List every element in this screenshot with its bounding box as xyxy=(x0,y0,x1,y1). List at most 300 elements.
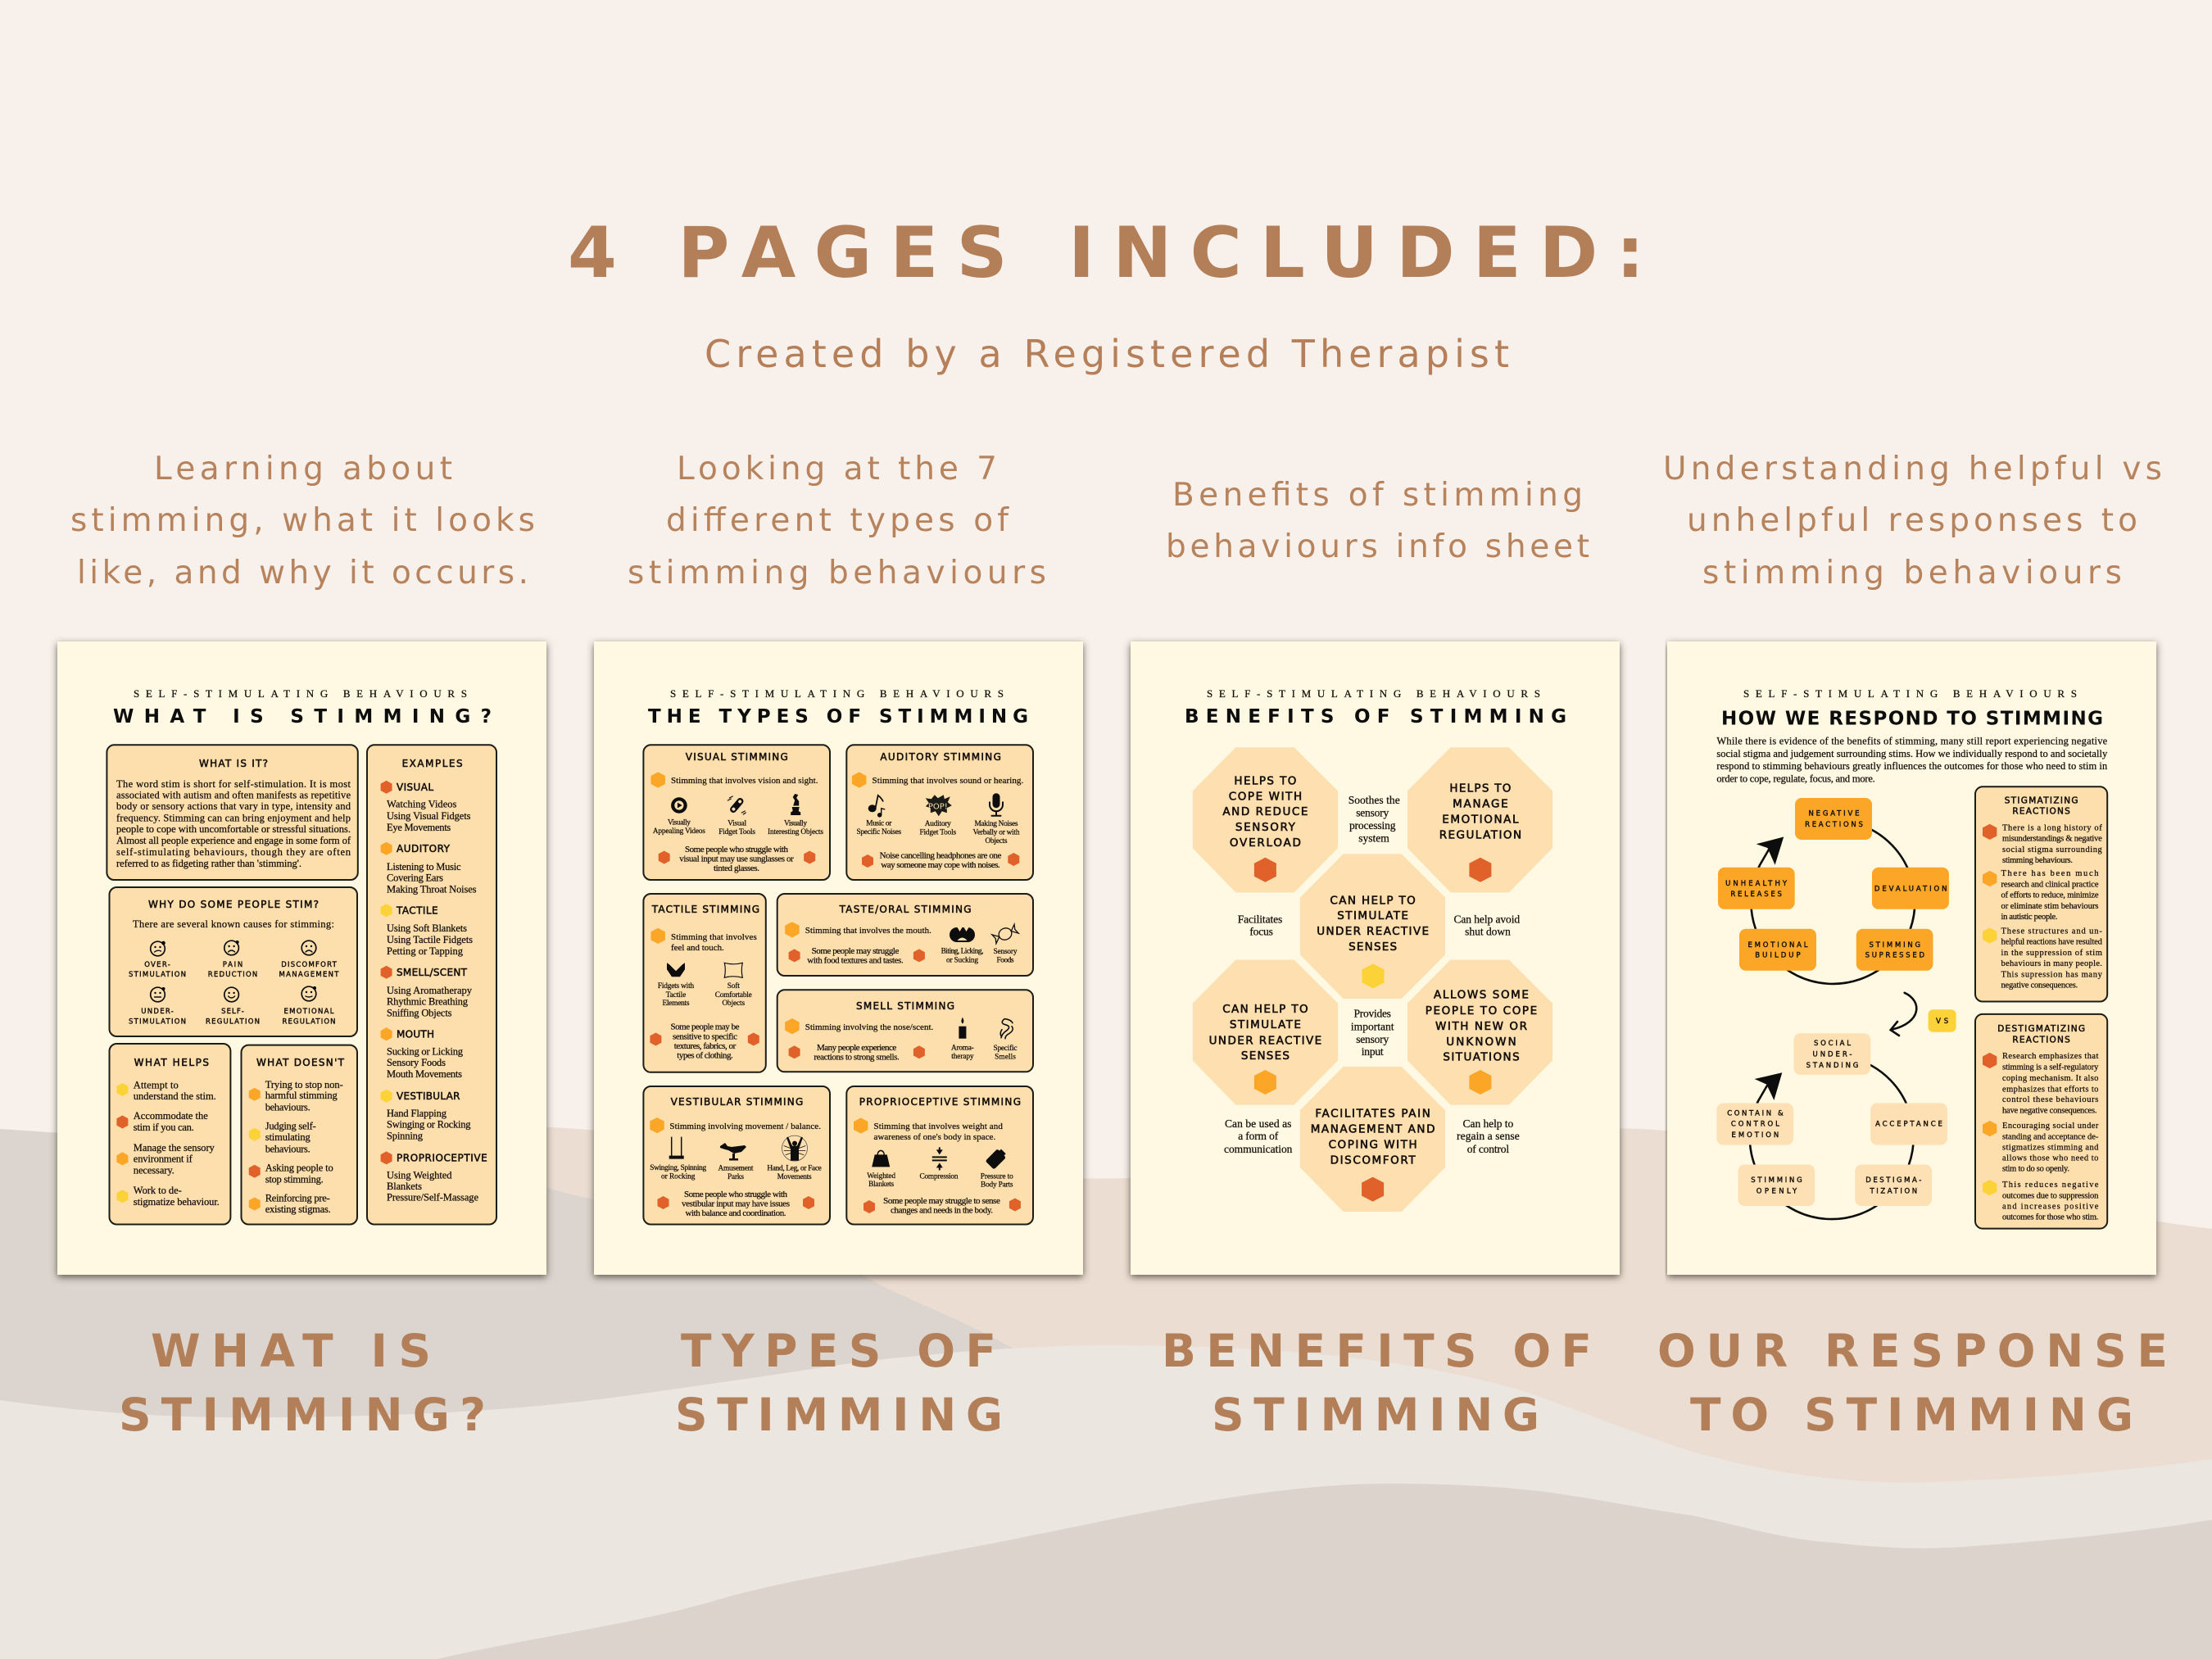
panel: destigmatizing reactions: allows those who need to xyxy=(2002,1154,2098,1163)
panel: visual stimming: Stimming that involves vision and sight. xyxy=(671,776,818,786)
panel: what is it: Almost all people experience and engage in some form of xyxy=(116,835,351,846)
panel: examples: MOUTH xyxy=(397,1029,434,1040)
panel: examples: Using Tactile Fidgets xyxy=(387,934,473,945)
panel: destigmatizing reactions: This reduces negative xyxy=(2002,1181,2099,1190)
icon: body movement xyxy=(782,1135,808,1161)
panel: what helps: stigmatize behaviour. xyxy=(134,1196,220,1208)
octagon: under reactive senses xyxy=(1300,854,1445,999)
octagon: sensory overload: COPE WITH xyxy=(1229,790,1302,803)
panel: proprioceptive stimming: awareness of one's body in space. xyxy=(873,1132,995,1142)
cycle: positive responses: ACCEPTANCE xyxy=(1875,1121,1942,1129)
octagon: emotional regulation: MANAGE xyxy=(1453,798,1508,811)
note: sensory input: important xyxy=(1351,1021,1394,1033)
panel: examples: Watching Videos xyxy=(387,799,457,810)
panel: stigmatizing reactions xyxy=(1975,786,2107,1001)
panel: what is it: body or sensory actions that vary in type, intensity and xyxy=(116,800,351,812)
icon: play button xyxy=(671,797,687,814)
background: light wave xyxy=(0,1345,2212,1659)
intro paragraph: While there is evidence of the benefits of stimming, many still report experiencing negative xyxy=(1716,736,2108,747)
panel: auditory stimming: Verbally or with xyxy=(973,828,1020,836)
panel: auditory stimming: Noise cancelling headphones are one xyxy=(880,850,1001,860)
page 1 header: SELF-STIMULATING BEHAVIOURS xyxy=(134,687,467,700)
panel: examples: EXAMPLES xyxy=(402,758,463,769)
caption: our response to stimming xyxy=(1657,1325,2168,1441)
title: 4 PAGES INCLUDED: xyxy=(568,212,1644,294)
panel: smell stimming: Aroma- xyxy=(951,1045,974,1053)
panel: examples: Sucking or Licking xyxy=(387,1045,464,1057)
badge: vs xyxy=(1929,1009,1956,1032)
cycle: negative responses: RELEASES xyxy=(1730,891,1782,899)
panel: tactile stimming: Fidgets with xyxy=(658,982,694,990)
panel: destigmatizing reactions: outcomes due to suppression xyxy=(2002,1191,2099,1200)
octagon: new situations xyxy=(1407,960,1552,1105)
panel: examples: Eye Movements xyxy=(387,822,451,833)
panel: proprioceptive stimming: changes and needs in the body. xyxy=(891,1206,993,1216)
panel: smell stimming: Smells xyxy=(995,1053,1016,1061)
panel: vestibular stimming: Parks xyxy=(728,1173,744,1181)
panel: proprioceptive stimming: Weighted xyxy=(867,1172,895,1181)
page 3: benefits of stimming xyxy=(1131,641,1620,1275)
cycle: negative responses: EMOTIONAL xyxy=(1748,941,1808,950)
icon: pain reduction face xyxy=(224,941,239,955)
octagon: pain management: COPING WITH xyxy=(1329,1138,1417,1151)
panel: auditory stimming: way someone may cope with noises. xyxy=(881,860,1000,870)
panel: tactile stimming: Tactile xyxy=(666,991,686,999)
note: soothes: system xyxy=(1358,832,1389,844)
octagon: new situations: PEOPLE TO COPE xyxy=(1426,1004,1537,1018)
caption: what is stimming: STIMMING? xyxy=(119,1389,486,1441)
panel: what doesn't help: harmful stimming xyxy=(265,1090,338,1101)
octagon: under reactive senses: UNDER REACTIVE xyxy=(1317,925,1429,938)
panel: tactile stimming: Objects xyxy=(722,999,746,1008)
caption: what is stimming: WHAT IS xyxy=(151,1325,431,1377)
panel: auditory stimming: Music or xyxy=(866,820,892,828)
panel: proprioceptive stimming: Some people may struggle to sense xyxy=(883,1196,1000,1206)
panel: destigmatizing reactions: REACTIONS xyxy=(2012,1035,2070,1045)
panel: examples: SMELL/SCENT xyxy=(397,967,468,978)
panel: stigmatizing reactions: research and clinical practice xyxy=(2001,880,2099,889)
badge: vs: VS xyxy=(1936,1018,1948,1026)
panel: vestibular stimming: VESTIBULAR STIMMING xyxy=(671,1096,803,1108)
cycle: negative responses: NEGATIVE xyxy=(1809,810,1860,818)
panel: proprioceptive stimming: Pressure to xyxy=(981,1172,1013,1181)
panel: what is it: The word stim is short for self-stimulation. It is most xyxy=(116,778,351,790)
cycle: positive responses: UNDER- xyxy=(1812,1050,1852,1058)
cycle: negative responses xyxy=(1718,798,1949,984)
background: peach wave xyxy=(0,1124,2212,1659)
icon: soft pillow xyxy=(724,963,742,977)
panel: examples: Covering Ears xyxy=(387,872,443,883)
octagon: new situations: WITH NEW OR xyxy=(1435,1020,1527,1033)
panel: stigmatizing reactions: stimming behaviours. xyxy=(2002,856,2073,865)
panel: proprioceptive stimming: Blankets xyxy=(868,1181,894,1189)
page 3 header: BENEFITS OF STIMMING xyxy=(1185,706,1566,728)
panel: vestibular stimming: Amusement xyxy=(718,1165,754,1173)
caption: types of stimming xyxy=(675,1325,1003,1441)
cycle: positive responses: CONTROL xyxy=(1731,1121,1779,1129)
cause labels: REGULATION xyxy=(206,1018,260,1026)
icon: pop burst xyxy=(926,795,952,816)
arrowhead: negative cycle xyxy=(1756,837,1784,865)
panel: what doesn't help: Asking people to xyxy=(265,1163,333,1174)
icon: pop burst: POP! xyxy=(928,802,948,811)
note: avoid shut down: shut down xyxy=(1465,926,1511,938)
octagon: under reactive senses second: UNDER REACTIVE xyxy=(1209,1034,1321,1047)
icon: swing xyxy=(669,1137,684,1159)
octagon: sensory overload: AND REDUCE xyxy=(1222,805,1308,818)
panel: auditory stimming: Fidget Tools xyxy=(919,828,957,836)
panel: vestibular stimming xyxy=(643,1086,830,1224)
panel: stigmatizing reactions: negative consequences. xyxy=(2001,981,2078,990)
cause labels: STIMULATION xyxy=(129,1018,186,1026)
panel: what doesn't help: Reinforcing pre- xyxy=(265,1192,330,1203)
octagon: sensory overload: OVERLOAD xyxy=(1230,836,1301,850)
caption: benefits of stimming: BENEFITS OF xyxy=(1162,1325,1592,1377)
panel: what is it: people to cope with uncomfortable or stressful situations. xyxy=(116,823,351,835)
octagon: under reactive senses second: SENSES xyxy=(1241,1049,1290,1063)
octagon: under reactive senses: STIMULATE xyxy=(1337,909,1408,922)
panel: proprioceptive stimming: Compression xyxy=(919,1172,959,1181)
panel: what helps: understand the stim. xyxy=(134,1090,216,1102)
octagon: under reactive senses: SENSES xyxy=(1349,941,1397,954)
octagon: under reactive senses second: CAN HELP TO xyxy=(1222,1003,1308,1016)
panel: visual stimming: Some people who struggle with xyxy=(685,845,788,854)
description: page 1: stimming, what it looks xyxy=(70,502,535,539)
panel: what is it: self-stimulating behaviours, though they are often xyxy=(116,846,351,858)
cause labels: REGULATION xyxy=(282,1018,336,1026)
icon: microphone xyxy=(990,793,1003,816)
cause labels: UNDER- xyxy=(141,1008,174,1016)
panel: smell stimming: SMELL STIMMING xyxy=(856,1000,954,1012)
cycle: positive responses xyxy=(1716,1033,1947,1219)
page 4: how we respond xyxy=(1667,641,2156,1275)
panel: stigmatizing reactions: misunderstandings & negative xyxy=(2002,835,2102,844)
panel: stigmatizing reactions: This supression has many xyxy=(2001,970,2103,980)
panel: examples xyxy=(367,745,496,1224)
note: focus: focus xyxy=(1249,926,1273,938)
octagon: new situations: SITUATIONS xyxy=(1443,1051,1520,1064)
panel: what helps: Manage the sensory xyxy=(134,1142,215,1154)
panel: smell stimming: Specific xyxy=(993,1044,1018,1053)
octagon: emotional regulation: EMOTIONAL xyxy=(1442,813,1519,826)
description: page 1: Learning about xyxy=(154,451,452,487)
note: sensory input: sensory xyxy=(1356,1033,1389,1045)
panel: vestibular stimming: Swinging, Spinning xyxy=(650,1164,707,1172)
panel: what is it xyxy=(107,745,358,880)
panel: visual stimming: Visually xyxy=(784,820,807,828)
panel: stigmatizing reactions: behaviours in many people. xyxy=(2001,959,2102,968)
icon: fidget tool xyxy=(728,796,746,814)
panel: examples: Mouth Movements xyxy=(387,1068,462,1080)
panel: examples: TACTILE xyxy=(396,904,438,916)
note: sense of control: of control xyxy=(1467,1143,1509,1155)
panel: visual stimming: VISUAL STIMMING xyxy=(686,751,788,763)
panel: why do some people stim: WHY DO SOME PEOPLE STIM? xyxy=(148,899,319,910)
panel: what helps: environment if xyxy=(134,1153,193,1164)
cause labels: PAIN xyxy=(223,961,243,969)
panel: examples: AUDITORY xyxy=(397,843,451,854)
panel: visual stimming: tinted glasses. xyxy=(714,863,759,873)
page 3 header xyxy=(1185,687,1566,728)
panel: auditory stimming xyxy=(846,745,1033,880)
description: page 2: Looking at the 7 xyxy=(677,451,997,487)
octagon: pain management: MANAGEMENT AND xyxy=(1311,1122,1435,1135)
panel: tactile stimming: types of clothing. xyxy=(677,1050,733,1060)
panel: proprioceptive stimming: PROPRIOCEPTIVE STIMMING xyxy=(859,1096,1021,1108)
note: soothes: processing xyxy=(1349,819,1396,832)
caption: benefits of stimming: STIMMING xyxy=(1212,1389,1539,1441)
note: sensory input: input xyxy=(1362,1045,1384,1058)
panel: stigmatizing reactions: These structures and un- xyxy=(2001,927,2102,936)
cycle: negative responses: DEVALUATION xyxy=(1874,885,1947,893)
panel: examples: Using Aromatherapy xyxy=(387,985,473,996)
panel: tactile stimming: Elements xyxy=(662,999,690,1008)
description: page 3: Benefits of stimming xyxy=(1172,477,1583,514)
icon: self-regulation face xyxy=(224,987,238,1002)
cycle: negative responses: STIMMING xyxy=(1870,941,1920,950)
panel: destigmatizing reactions xyxy=(1975,1014,2107,1229)
panel: destigmatizing reactions: stigmatizes stimming and xyxy=(2002,1144,2099,1153)
panel: vestibular stimming: Stimming involving movement / balance. xyxy=(669,1122,821,1131)
cycle: negative responses: REACTIONS xyxy=(1805,821,1863,829)
intro paragraph: social stigma and judgement surrounding stims. How we individually respond to and societally xyxy=(1716,748,2108,759)
caption: types of stimming: TYPES OF xyxy=(681,1325,996,1377)
panel: taste/oral stimming: TASTE/ORAL STIMMING xyxy=(839,904,972,915)
panel: what doesn't help: behaviours. xyxy=(265,1102,310,1113)
panel: what helps: necessary. xyxy=(134,1165,175,1176)
note: sense of control: regain a sense xyxy=(1457,1130,1520,1142)
cause labels: OVER- xyxy=(144,961,170,969)
panel: destigmatizing reactions: DESTIGMATIZING xyxy=(1997,1024,2085,1034)
panel: proprioceptive stimming: Body Parts xyxy=(981,1181,1013,1190)
panel: examples: Using Soft Blankets xyxy=(387,922,467,934)
icon: pressure xyxy=(986,1147,1008,1170)
panel: what doesn't help: Judging self- xyxy=(265,1121,316,1132)
cycle: positive responses: DESTIGMA- xyxy=(1865,1176,1921,1185)
panel: what helps xyxy=(110,1044,230,1224)
icon: over-stimulation face xyxy=(151,941,165,956)
note: communication: a form of xyxy=(1238,1130,1279,1142)
panel: what doesn't help: stop stimming. xyxy=(265,1173,324,1185)
description: page 2: stimming behaviours xyxy=(628,555,1046,592)
panel: destigmatizing reactions: coping mechanism. It also xyxy=(2002,1074,2098,1083)
panel: what helps: stim if you can. xyxy=(134,1122,194,1133)
note: focus xyxy=(1238,913,1282,938)
octagon: pain management xyxy=(1300,1067,1445,1212)
page 1 header xyxy=(113,687,492,728)
cycle: negative responses: SUPRESSED xyxy=(1865,952,1924,960)
panel: what is it: associated with autism and often manifests as repetitive xyxy=(116,790,351,801)
cause labels: DISCOMFORT xyxy=(281,961,338,969)
page 3 header: SELF-STIMULATING BEHAVIOURS xyxy=(1207,687,1540,700)
panel: examples: Spinning xyxy=(387,1130,424,1141)
description: page 1: like, and why it occurs. xyxy=(77,555,528,592)
panel: what is it: WHAT IS IT? xyxy=(199,758,268,769)
panel: proprioceptive stimming xyxy=(846,1086,1033,1224)
intro paragraph: order to cope, regulate, focus, and more. xyxy=(1716,773,1875,785)
panel: stigmatizing reactions: There has been much xyxy=(2001,869,2099,878)
cause labels xyxy=(129,961,339,1026)
cycle: negative responses: BUILDUP xyxy=(1755,952,1801,960)
panel: what doesn't help xyxy=(241,1045,357,1224)
panel: stigmatizing reactions: of efforts to reduce, minimize xyxy=(2001,891,2099,900)
panel: examples: VISUAL xyxy=(397,782,433,793)
octagon: under reactive senses: CAN HELP TO xyxy=(1330,894,1416,907)
panel: what is it: referred to as fidgeting rather than 'stimming'. xyxy=(116,858,301,869)
octagon: sensory overload xyxy=(1193,747,1338,892)
icon: candy xyxy=(991,923,1019,945)
page 4 header: HOW WE RESPOND TO STIMMING xyxy=(1721,708,2103,729)
octagon: emotional regulation xyxy=(1407,747,1552,892)
panel: destigmatizing reactions: Encouraging social under xyxy=(2002,1122,2099,1131)
panel: stigmatizing reactions: REACTIONS xyxy=(2012,807,2070,817)
panel: visual stimming xyxy=(643,745,830,880)
octagon: pain management: FACILITATES PAIN xyxy=(1315,1108,1430,1121)
panel: taste/oral stimming: Some people may struggle xyxy=(812,946,900,956)
panel: auditory stimming: Objects xyxy=(985,837,1008,845)
caption: our response to stimming: TO STIMMING xyxy=(1690,1389,2133,1441)
panel: smell stimming: Many people experience xyxy=(817,1043,896,1053)
panel: taste/oral stimming: with food textures and tastes. xyxy=(807,955,904,965)
icon: weight xyxy=(872,1150,890,1167)
icon: discomfort face xyxy=(301,941,316,955)
description: page 4: Understanding helpful vs xyxy=(1663,451,2162,487)
panel: visual stimming: Interesting Objects xyxy=(768,828,823,836)
cycle: positive responses: STANDING xyxy=(1806,1062,1858,1070)
panel: what helps: Work to de- xyxy=(134,1185,182,1196)
octagon: emotional regulation: REGULATION xyxy=(1439,828,1521,841)
panel: stigmatizing reactions: helpful reactions have resulted xyxy=(2001,938,2103,947)
panel: auditory stimming: Making Noises xyxy=(975,820,1018,828)
panel: smell stimming xyxy=(777,990,1033,1072)
panel: examples: Pressure/Self-Massage xyxy=(387,1191,478,1203)
octagon: sensory overload: SENSORY xyxy=(1235,821,1296,834)
icon: emotional regulation face xyxy=(301,986,316,1001)
panel: stigmatizing reactions: social stigma surrounding xyxy=(2002,845,2103,854)
panel: visual stimming: Visual xyxy=(728,820,747,828)
panel: examples: Blankets xyxy=(387,1181,422,1192)
panel: tactile stimming: Soft xyxy=(728,981,740,990)
note: avoid shut down: Can help avoid xyxy=(1453,913,1520,925)
panel: destigmatizing reactions: standing and acceptance de- xyxy=(2002,1132,2099,1141)
page 2 header: THE TYPES OF STIMMING xyxy=(648,706,1028,728)
panel: what helps: Attempt to xyxy=(134,1080,179,1091)
icon: hands xyxy=(667,963,685,977)
panel: destigmatizing reactions: stim to do so openly. xyxy=(2002,1165,2069,1174)
octagon: new situations: ALLOWS SOME xyxy=(1434,989,1529,1002)
panel: why do some people stim: There are several known causes for stimming: xyxy=(133,918,334,930)
panel: smell stimming: therapy xyxy=(951,1053,974,1061)
octagon: under reactive senses second xyxy=(1193,960,1338,1105)
description: page 4: unhelpful responses to xyxy=(1687,502,2137,539)
cycle: positive responses: EMOTION xyxy=(1732,1131,1779,1140)
description: page 3 xyxy=(1166,477,1589,565)
intro paragraph xyxy=(1716,736,2108,785)
panel: smell stimming: Stimming involving the nose/scent. xyxy=(805,1022,934,1032)
page 4 header xyxy=(1721,687,2103,729)
octagon: emotional regulation: HELPS TO xyxy=(1449,782,1511,796)
octagon: under reactive senses second: STIMULATE xyxy=(1230,1018,1301,1031)
note: communication: Can be used as xyxy=(1225,1117,1291,1130)
panel: examples: Using Visual Fidgets xyxy=(387,810,471,822)
panel: examples: Swinging or Rocking xyxy=(387,1119,471,1131)
panel: examples: Using Weighted xyxy=(387,1169,452,1181)
icon: smell swirl xyxy=(1000,1019,1013,1039)
panel: tactile stimming: Stimming that involves xyxy=(671,932,757,942)
octagon: pain management: DISCOMFORT xyxy=(1330,1154,1416,1167)
caption: benefits of stimming xyxy=(1162,1325,1592,1441)
panel: what doesn't help: WHAT DOESN'T xyxy=(256,1057,345,1068)
note: sensory input: Provides xyxy=(1353,1008,1391,1020)
panel: vestibular stimming: vestibular input may have issues xyxy=(682,1199,790,1209)
panel: visual stimming: Fidget Tools xyxy=(718,828,755,836)
panel: stigmatizing reactions: or eliminate stim behaviours xyxy=(2001,902,2099,911)
cycle: negative responses: UNHEALTHY xyxy=(1725,880,1788,888)
panel: vestibular stimming: Movements xyxy=(777,1173,812,1181)
panel: tactile stimming xyxy=(643,894,766,1072)
panel: what doesn't help: Trying to stop non- xyxy=(265,1079,343,1090)
panel: taste/oral stimming: or Sucking xyxy=(946,957,978,965)
octagon: new situations: UNKNOWN xyxy=(1446,1036,1516,1049)
panel: vestibular stimming: or Rocking xyxy=(661,1172,696,1181)
icon: under-stimulation face xyxy=(151,987,165,1002)
note: sense of control xyxy=(1457,1117,1520,1155)
panel: destigmatizing reactions: have negative consequences. xyxy=(2002,1106,2097,1115)
panel: auditory stimming: Auditory xyxy=(925,820,951,828)
panel: auditory stimming: Specific Noises xyxy=(857,827,901,836)
panel: what doesn't help: existing stigmas. xyxy=(265,1203,331,1215)
panel: tactile stimming: Comfortable xyxy=(715,990,752,999)
cycle: positive responses: CONTAIN & xyxy=(1727,1109,1784,1117)
description: page 2 xyxy=(628,451,1046,592)
panel: taste/oral stimming: Sensory xyxy=(993,948,1018,956)
panel: tactile stimming: textures, fabrics, or xyxy=(674,1041,737,1051)
panel: stigmatizing reactions: in autistic people. xyxy=(2001,913,2058,922)
cause labels: MANAGEMENT xyxy=(279,971,339,979)
panel: destigmatizing reactions: emphasizes that efforts to xyxy=(2002,1085,2098,1094)
panel: stigmatizing reactions: STIGMATIZING xyxy=(2005,796,2078,805)
page 2: types of stimming xyxy=(594,641,1083,1275)
cause labels: STIMULATION xyxy=(129,971,186,979)
panel: destigmatizing reactions: stimming is a self-regulatory xyxy=(2002,1063,2099,1072)
icon: music notes xyxy=(868,796,885,818)
panel: destigmatizing reactions: Research emphasizes that xyxy=(2002,1052,2098,1061)
icon: compression xyxy=(932,1147,947,1170)
note: sense of control: Can help to xyxy=(1463,1117,1514,1130)
note: soothes: sensory xyxy=(1356,806,1389,818)
page 2 header xyxy=(648,687,1028,728)
note: soothes: Soothes the xyxy=(1349,794,1400,806)
panel: proprioceptive stimming: Stimming that involves weight and xyxy=(873,1122,1003,1131)
panel: what helps: Accommodate the xyxy=(134,1110,208,1122)
panel: what doesn't help: stimulating xyxy=(265,1131,310,1143)
panel: taste/oral stimming: Stimming that involves the mouth. xyxy=(805,926,931,936)
note: sensory input xyxy=(1351,1008,1394,1058)
panel: destigmatizing reactions: and increases positive xyxy=(2002,1203,2099,1212)
panel: smell stimming: reactions to strong smells. xyxy=(814,1052,900,1062)
panel: tactile stimming: TACTILE STIMMING xyxy=(651,904,759,915)
description: page 4 xyxy=(1663,451,2162,592)
panel: taste/oral stimming: Biting, Licking, xyxy=(941,947,983,955)
panel: stigmatizing reactions: in the suppression of stim xyxy=(2001,949,2102,958)
cycle: positive responses: SOCIAL xyxy=(1814,1040,1851,1048)
panel: destigmatizing reactions: outcomes for those who stim. xyxy=(2002,1213,2098,1222)
panel: vestibular stimming: Hand, Leg, or Face xyxy=(767,1165,822,1173)
page 4 header: SELF-STIMULATING BEHAVIOURS xyxy=(1743,687,2077,700)
panel: examples: Petting or Tapping xyxy=(387,945,464,957)
note: avoid shut down xyxy=(1453,913,1520,938)
panel: auditory stimming: Stimming that involves sound or hearing. xyxy=(872,776,1023,786)
